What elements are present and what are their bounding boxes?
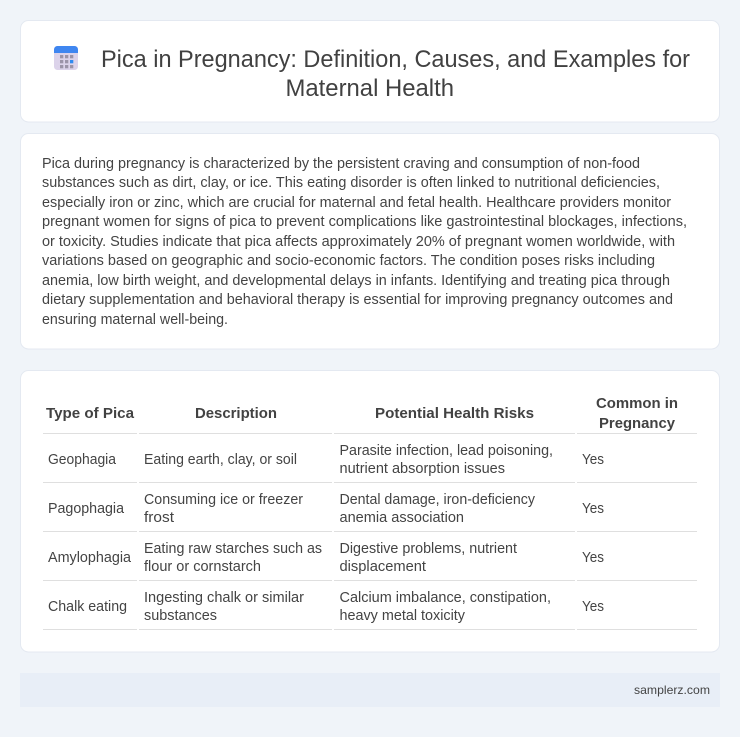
table row: Geophagia: Yes: [582, 452, 604, 468]
text block: summary paragraph: ensuring maternal well-being.: [42, 312, 228, 328]
table row: Pagophagia: Dental damage, iron-deficiency: [340, 492, 536, 508]
table row: Chalk eating: Calcium imbalance, constipation,: [340, 590, 551, 606]
table row: Amylophagia: Digestive problems, nutrient: [340, 541, 517, 557]
table row: Amylophagia: displacement: [340, 559, 426, 575]
text block: summary paragraph: substances such as dirt, clay, or ice. This eating disorder is often linked to nutritional deficiencies,: [42, 175, 660, 191]
table row: Amylophagia: Amylophagia: [48, 550, 131, 566]
text block: summary paragraph: variations based on geographic and socio-economic factors. The condition poses risks including: [42, 253, 655, 269]
text block: summary paragraph: dietary supplementation and behavioral therapy is essential for improving pregnancy outcomes and: [42, 292, 673, 308]
title: Maternal Health: [286, 75, 454, 102]
table header row: Type of Pica: [46, 406, 135, 422]
panel: table card: [20, 370, 720, 652]
table row: Pagophagia: frost: [144, 510, 174, 526]
table row: Pagophagia: Pagophagia: [48, 501, 124, 517]
table header row: Description: [195, 406, 277, 422]
table row: Chalk eating: Ingesting chalk or similar: [144, 590, 304, 606]
table row: Geophagia: Geophagia: [48, 452, 116, 468]
text block: summary paragraph: Pica during pregnancy is characterized by the persistent craving and consumption of non-food: [42, 156, 640, 172]
panel: header card: [20, 20, 720, 122]
table row: Geophagia: nutrient absorption issues: [340, 461, 505, 477]
table header row: Pregnancy: [599, 416, 675, 432]
title: Pica in Pregnancy: Definition, Causes, and Examples for: [101, 46, 690, 73]
table header row: Common in: [596, 396, 678, 412]
table row: Chalk eating: heavy metal toxicity: [340, 608, 466, 624]
table header row: [43, 396, 697, 434]
table row: Amylophagia: Yes: [582, 550, 604, 566]
table row: Pagophagia: Consuming ice or freezer: [144, 492, 303, 508]
table row: Pagophagia: Yes: [582, 501, 604, 517]
text block: summary paragraph: or toxicity. Studies indicate that pica affects approximately 20% of pregnant women worldwide, with: [42, 234, 675, 250]
table row: Geophagia: [43, 443, 697, 483]
table row: Chalk eating: Yes: [582, 599, 604, 615]
table row: Chalk eating: substances: [144, 608, 217, 624]
table row: Pagophagia: [43, 492, 697, 532]
footer source text: samplerz.com: [634, 683, 710, 697]
text block: summary paragraph: especially iron or zinc, which are crucial for maternal and fetal health. Healthcare providers monitor: [42, 195, 671, 211]
table row: Geophagia: Parasite infection, lead poisoning,: [340, 443, 553, 459]
title: [101, 46, 690, 102]
icon: calendar: [54, 46, 78, 70]
table header row: Potential Health Risks: [375, 406, 534, 422]
table row: Chalk eating: [43, 590, 697, 630]
footer bar: [20, 673, 720, 707]
panel: summary card: [20, 134, 720, 349]
table row: Amylophagia: flour or cornstarch: [144, 559, 261, 575]
table row: Pagophagia: anemia association: [340, 510, 464, 526]
table row: Amylophagia: Eating raw starches such as: [144, 541, 322, 557]
table row: Amylophagia: [43, 541, 697, 581]
text block: summary paragraph: [42, 156, 687, 328]
table row: Chalk eating: Chalk eating: [48, 599, 127, 615]
text block: summary paragraph: anemia, low birth weight, and developmental delays in infants. Identifying and treating pica through: [42, 273, 670, 289]
table row: Geophagia: Eating earth, clay, or soil: [144, 452, 297, 468]
text block: summary paragraph: pregnant women for signs of pica to prevent complications like gastrointestinal blockages, infections,: [42, 214, 687, 230]
